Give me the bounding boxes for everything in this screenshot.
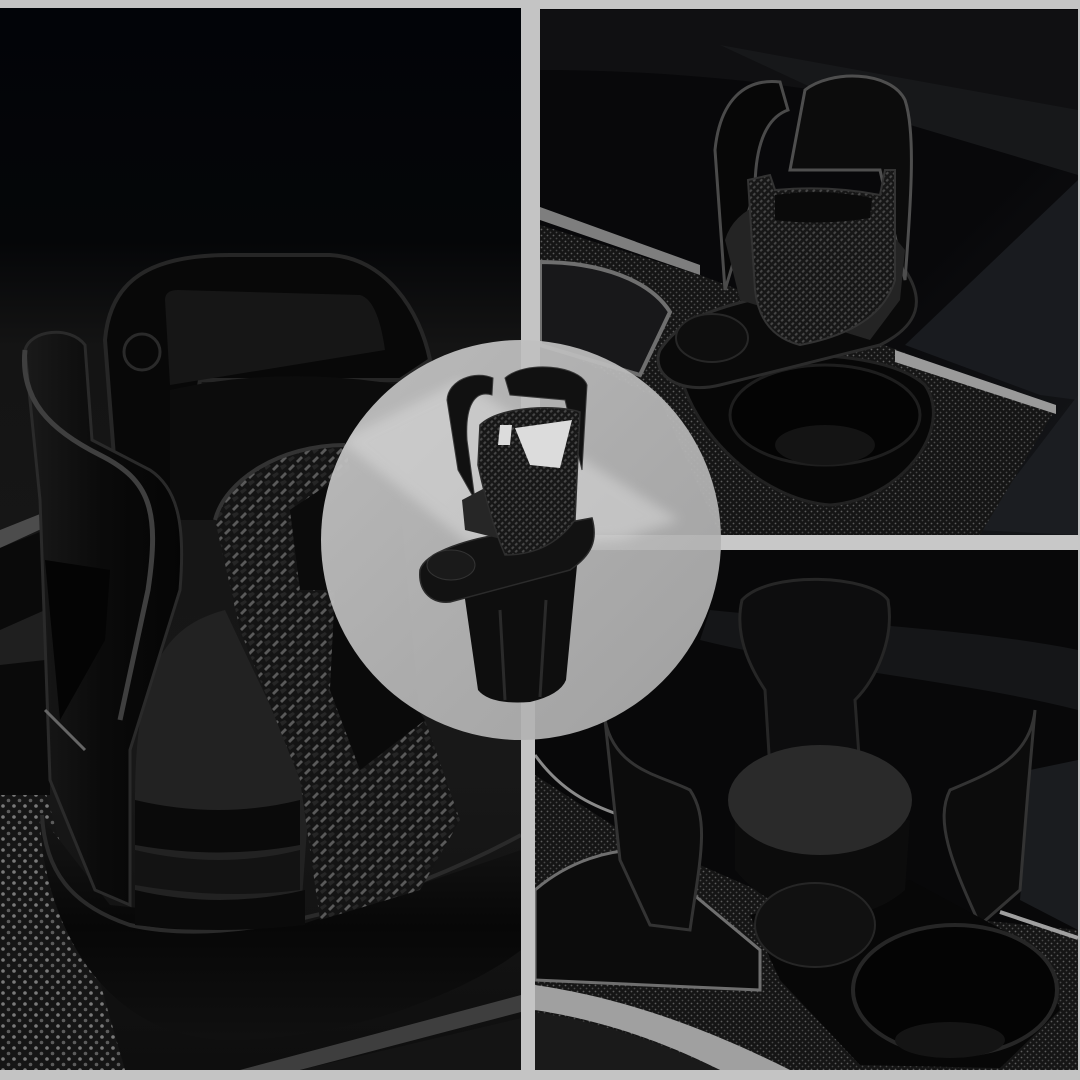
rear arm [740, 579, 889, 770]
circle backdrop reflections [340, 380, 680, 545]
panel: top right in-car photo [540, 9, 1078, 535]
coaster stack [725, 195, 905, 340]
phone pad knob [427, 550, 475, 580]
upper platform [658, 270, 916, 388]
carbon console [535, 775, 1078, 1070]
right arm [944, 710, 1035, 925]
centre hub and foam disc [756, 890, 770, 898]
console edge highlights [240, 995, 521, 1070]
holder base ring [40, 821, 521, 982]
panel: bottom right disassembled photo [535, 550, 1078, 1070]
stacked coasters [135, 610, 310, 925]
center circle overlay [321, 340, 721, 740]
divider lines [521, 8, 540, 338]
upper console trim [540, 10, 1078, 160]
rear cup arm [105, 255, 430, 500]
left cup arm [25, 332, 182, 905]
right carbon arm [215, 445, 460, 920]
lower cup insert [463, 555, 578, 702]
rear arms [447, 375, 493, 500]
panel: left close-up photo [0, 8, 521, 1070]
platform [420, 518, 594, 602]
product: cup holder expander [420, 367, 594, 702]
carbon console [540, 225, 1055, 535]
stacked discs [462, 480, 505, 540]
left arm [605, 720, 702, 930]
base plate and cup ring [750, 910, 1060, 1068]
lower cup ring [680, 355, 933, 505]
front carbon arm [478, 408, 580, 555]
rear arms [715, 82, 788, 290]
console carbon surface [0, 790, 125, 1070]
right seat shadow [905, 180, 1078, 400]
front carbon cup [748, 170, 895, 345]
